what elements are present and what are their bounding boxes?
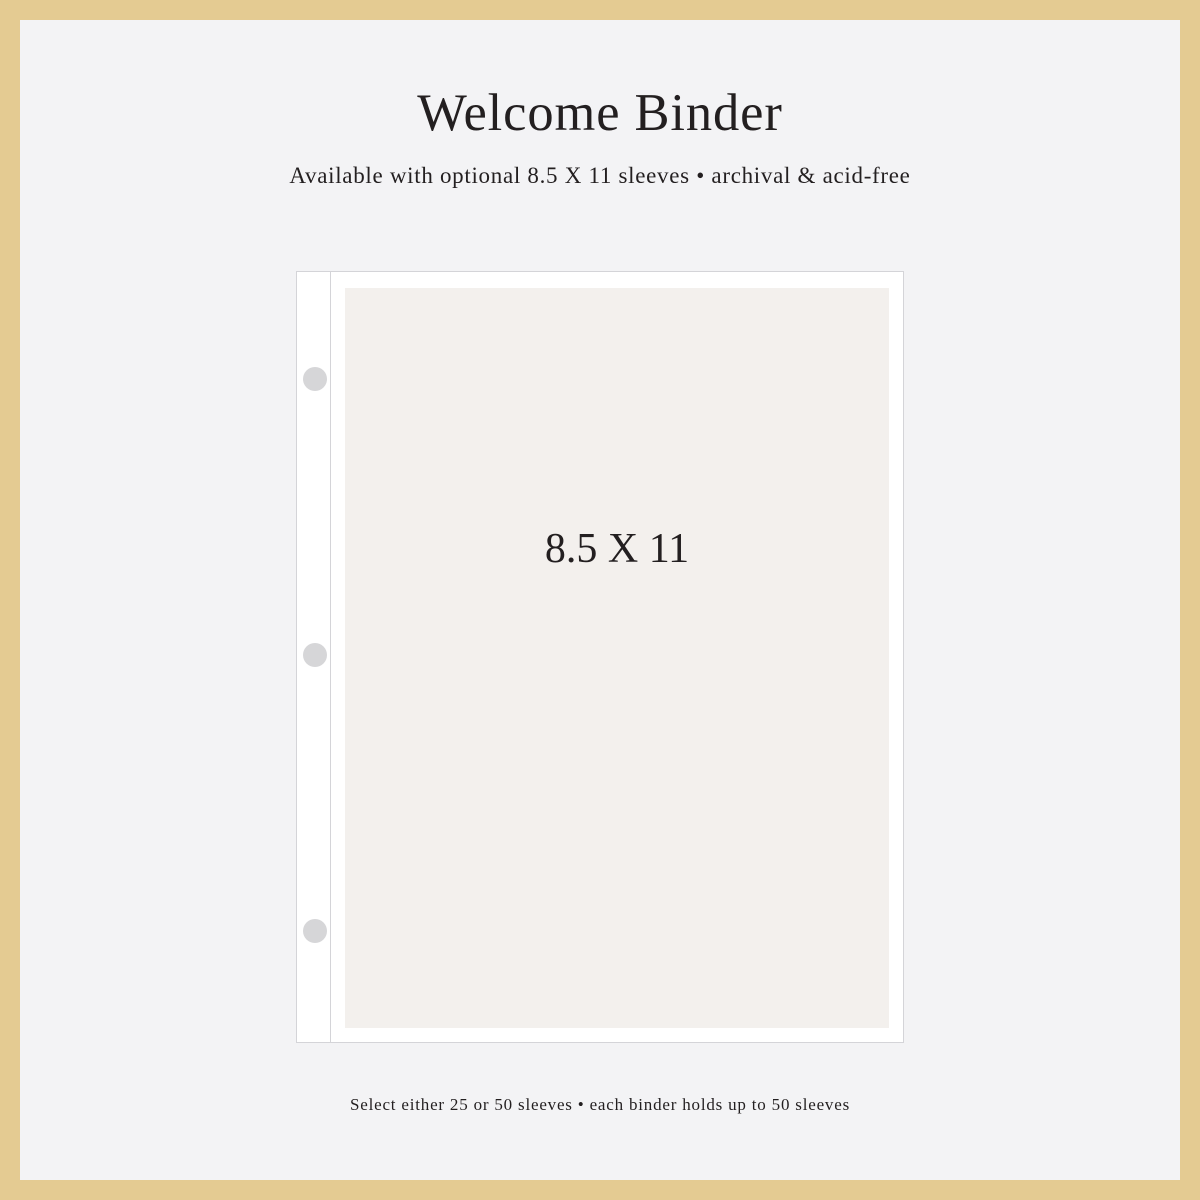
sleeve illustration <box>296 271 904 1043</box>
icon: hole 3 <box>303 919 327 943</box>
page size label: 8.5 X 11 <box>545 526 689 572</box>
subtitle: Available with optional 8.5 X 11 sleeves • archival & acid-free <box>289 163 911 188</box>
binding strip <box>330 272 331 1042</box>
icon: hole 2 <box>303 643 327 667</box>
footer note: Select either 25 or 50 sleeves • each binder holds up to 50 sleeves <box>350 1095 850 1114</box>
title: Welcome Binder <box>417 84 783 142</box>
icon: hole 1 <box>303 367 327 391</box>
page insert <box>345 288 889 1028</box>
